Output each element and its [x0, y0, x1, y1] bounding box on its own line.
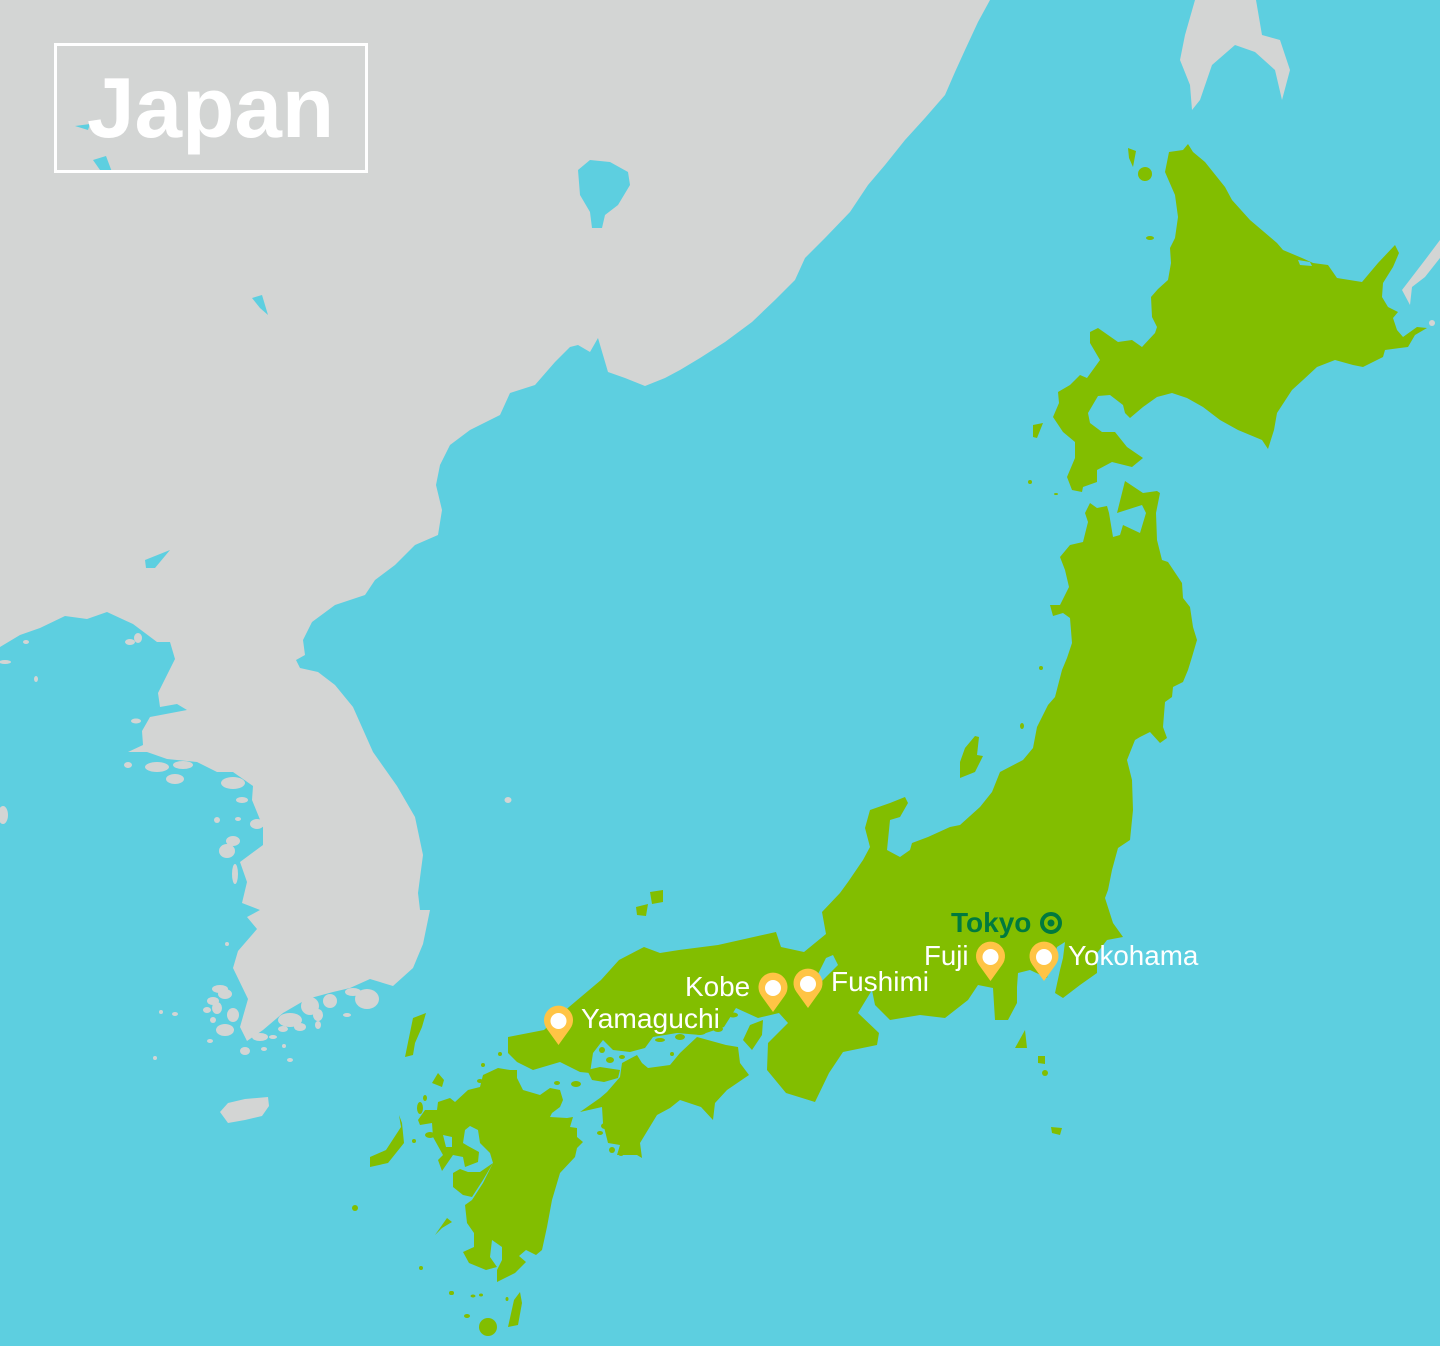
city: Yokohama — [1030, 940, 1199, 981]
Tokyo label: Tokyo — [951, 907, 1031, 938]
title box — [56, 44, 366, 172]
Kobe label: Kobe — [685, 971, 750, 1002]
Omura bay — [443, 1135, 452, 1147]
Kyushu — [418, 1068, 583, 1282]
Yakushima — [479, 1318, 497, 1336]
Sado — [960, 736, 983, 778]
small islets of the Seto Inland Sea and Kyushu coast — [352, 236, 1154, 1318]
Japan land masses — [352, 144, 1427, 1336]
Korean coastal islands — [0, 633, 512, 1062]
Sakhalin — [1180, 0, 1290, 110]
title frame — [56, 44, 366, 172]
Rebun — [1128, 148, 1136, 167]
Iki — [432, 1073, 444, 1087]
Oki islands — [650, 890, 663, 904]
Lake Saroma — [1298, 260, 1312, 266]
Goto islands — [370, 1115, 404, 1167]
city: Fuji — [924, 940, 1005, 981]
Jeju island — [220, 1097, 269, 1123]
Koshiki — [435, 1218, 452, 1235]
small lakes — [252, 295, 268, 315]
Lake Biwa — [815, 955, 838, 985]
title: Japan — [87, 61, 334, 156]
pin: Yokohama — [1030, 942, 1058, 981]
Izu islands — [1015, 1030, 1027, 1048]
Honshu — [508, 481, 1197, 1102]
Amakusa islands — [453, 1163, 493, 1197]
Rishiri — [1138, 167, 1152, 181]
city: Kobe — [685, 971, 787, 1012]
Yamaguchi label: Yamaguchi — [581, 1002, 720, 1034]
Fuji label: Fuji — [924, 940, 968, 971]
city: Yamaguchi — [544, 1002, 720, 1045]
Tsushima — [405, 1013, 426, 1057]
pin: Fuji — [976, 942, 1005, 981]
Fushimi label: Fushimi — [831, 966, 929, 997]
pin: Kobe — [759, 973, 787, 1012]
mainland Asia and Korean peninsula — [0, 0, 990, 1041]
Awaji island — [743, 1020, 763, 1050]
pin: Fushimi — [794, 969, 822, 1008]
city: Fushimi — [794, 966, 929, 1008]
Shikoku — [580, 1037, 749, 1158]
Kuril islands — [1402, 240, 1440, 326]
Hokkaido — [1053, 144, 1427, 492]
Yokohama label: Yokohama — [1068, 940, 1199, 971]
Lake Khanka — [578, 160, 630, 228]
water details — [443, 260, 1312, 1147]
capital: Tokyo — [951, 907, 1060, 938]
lakes and inlets on mainland — [75, 124, 630, 568]
Okushiri — [1033, 423, 1043, 438]
capital marker — [1042, 914, 1060, 932]
Tanegashima — [508, 1292, 522, 1327]
pin: Yamaguchi — [544, 1006, 573, 1045]
